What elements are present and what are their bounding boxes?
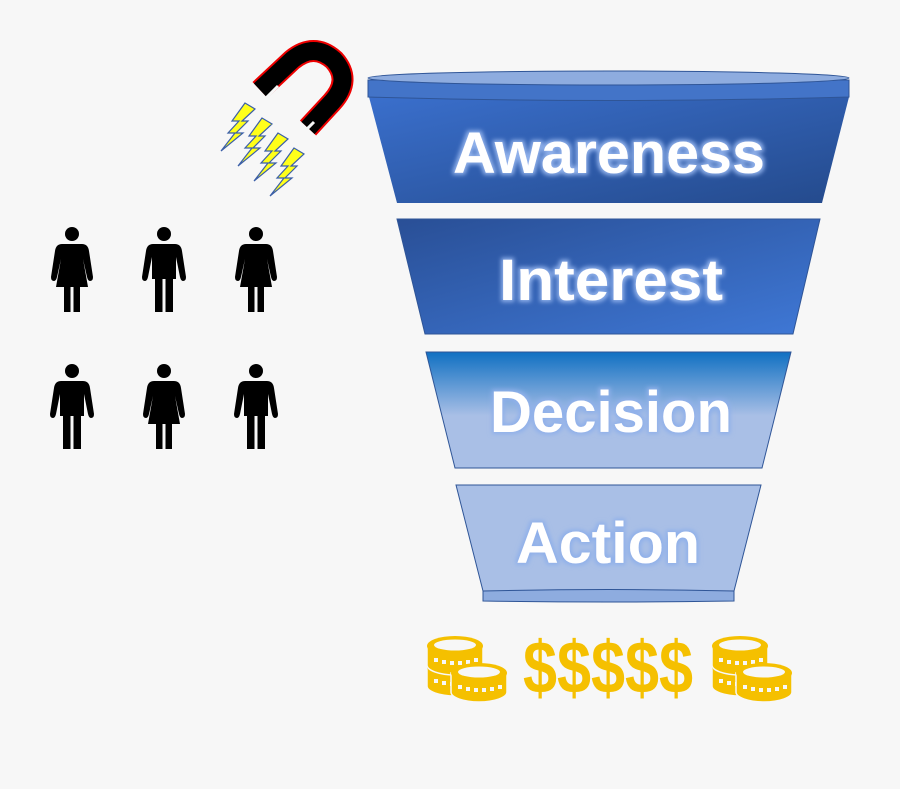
funnel stage: Awareness xyxy=(368,71,849,203)
funnel stage: Action xyxy=(456,485,761,602)
icon: magnet with lightning bolts xyxy=(221,51,343,196)
funnel stage: Decision: Decision xyxy=(490,380,732,445)
funnel stage: Action: Action xyxy=(516,511,700,576)
funnel stage: Decision xyxy=(426,352,791,468)
people group xyxy=(50,227,278,449)
funnel stage: Interest: Interest xyxy=(499,248,723,313)
icon: coin stack right xyxy=(712,636,792,702)
dollar signs: $$$$$ xyxy=(523,626,693,709)
icon: coin stack left xyxy=(427,636,507,702)
funnel stage: Awareness: Awareness xyxy=(453,121,765,186)
funnel stage: Interest xyxy=(397,219,820,334)
